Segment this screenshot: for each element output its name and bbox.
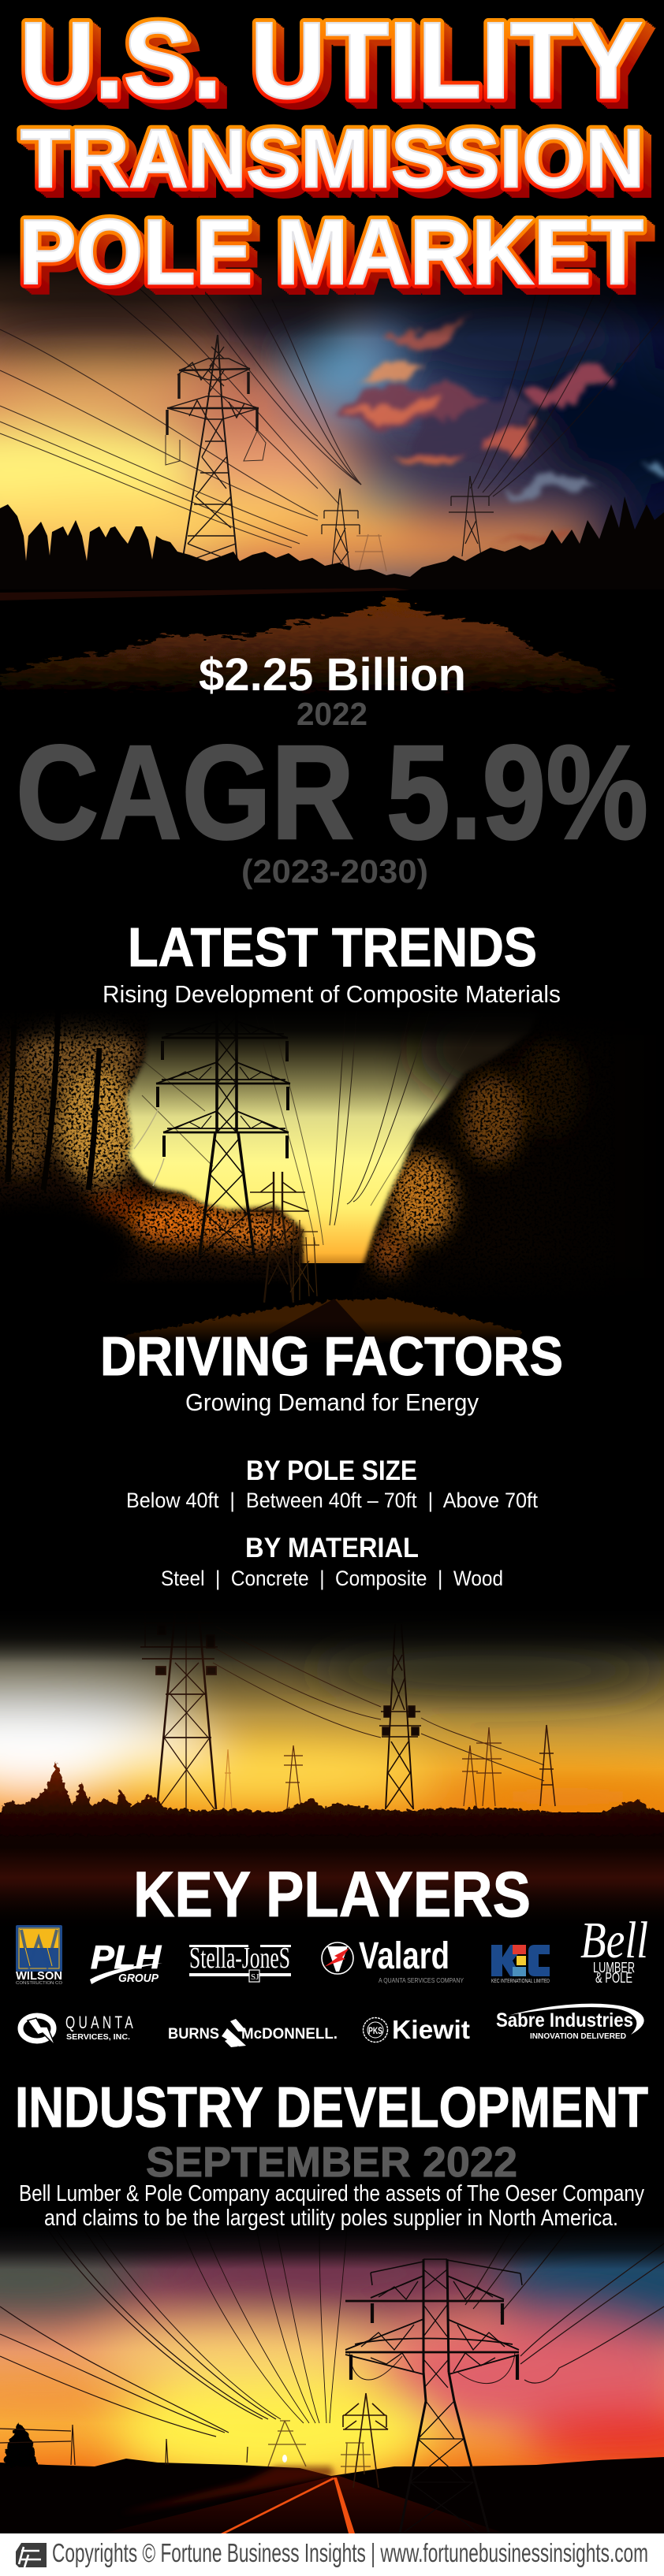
logo: Bell Lumber and Pole: [580, 1912, 648, 1986]
photo: sunset sky with transmission towers: [0, 252, 664, 697]
logo: Valard: A QUANTA SERVICES COMPANY: [379, 1976, 464, 1984]
logo: Kiewit: Kiewit: [392, 2015, 470, 2044]
logo: Wilson: CONSTRUCTION CO: [16, 1981, 62, 1986]
logo: Quanta Services: SERVICES, INC.: [66, 2033, 130, 2042]
title: [19, 0, 644, 303]
footer bar: [0, 2533, 664, 2576]
logo: Valard: [322, 1935, 464, 1984]
heading: driving factors: DRIVING FACTORS: [100, 1325, 563, 1387]
logo: Burns and McDonnell: McDONNELL.: [241, 2026, 338, 2043]
icon: small left tree: [5, 2423, 36, 2466]
heading: by material: BY MATERIAL: [245, 1533, 419, 1563]
development date: SEPTEMBER 2022: [146, 2139, 517, 2186]
icon: left small towers: [0, 2425, 248, 2465]
icon: middle tower: [379, 1624, 421, 1809]
logo: Sabre Industries: INNOVATION DELIVERED: [530, 2031, 626, 2041]
trees: right foliage: [360, 1032, 590, 1288]
road: [103, 2466, 505, 2533]
driver text: Growing Demand for Energy: [185, 1388, 479, 1416]
icon: foreground large tower: [345, 2259, 522, 2533]
heading: by pole size: BY POLE SIZE: [246, 1455, 417, 1486]
logo: Sabre Industries: [496, 2004, 644, 2041]
icon: main tower: [166, 335, 266, 563]
logo: Stella-Jones: SJ: [251, 1972, 259, 1982]
clouds: [341, 315, 664, 548]
power lines: [213, 1648, 544, 1781]
logo: Stella-Jones: Stella-JoneS: [189, 1942, 290, 1975]
logo: Stella-Jones: [189, 1942, 291, 1982]
logo: KEC: KEC INTERNATIONAL LIMITED: [491, 1979, 550, 1984]
heading: latest trends: LATEST TRENDS: [128, 916, 537, 978]
ground: [0, 1812, 664, 1912]
logo: Bell Lumber and Pole: LUMBER: [593, 1960, 635, 1976]
ground road: [103, 1299, 520, 1344]
power lines: [142, 1049, 451, 1245]
title line 2: TRANSMISSION: [21, 113, 644, 205]
industry development text: [19, 2181, 644, 2231]
trunks: [8, 1009, 99, 1190]
power lines: [0, 284, 664, 548]
sun: [282, 2455, 287, 2463]
icon: distant towers: [268, 2393, 388, 2488]
logo: PLH Group: GROUP: [118, 1972, 159, 1985]
icon: distant towers: [322, 476, 494, 574]
logo: Kiewit: PKS: [368, 2025, 382, 2036]
logo: Bell Lumber and Pole: & POLE: [595, 1970, 632, 1986]
tree line: [0, 1762, 664, 1836]
logo: Wilson: WILSON: [16, 1969, 62, 1983]
title line 1: U.S. UTILITY: [20, 0, 643, 121]
logo: Valard: Valard: [359, 1935, 450, 1977]
sky right shade: [397, 1039, 513, 1117]
title line 1: U.S. UTILITY: [20, 0, 643, 121]
forecast period: (2023-2030): [241, 853, 428, 890]
logo: Quanta Services: [21, 2013, 136, 2046]
logo: Burns and McDonnell: [168, 2019, 338, 2047]
logo: Quanta Services: QUANTA: [65, 2013, 136, 2032]
title line 1: U.S. UTILITY: [20, 0, 643, 121]
title line 2: TRANSMISSION: [21, 113, 644, 205]
trend text: Rising Development of Composite Materials: [103, 980, 561, 1008]
icon: receding towers: [250, 1172, 319, 1303]
icon: Fortune Business Insights logo: [16, 2543, 47, 2567]
heading: key players: KEY PLAYERS: [133, 1859, 531, 1931]
icon: foreground tower: [134, 1011, 290, 1255]
lower shade: [0, 1198, 664, 1344]
logo: Bell Lumber and Pole: Bell: [580, 1912, 648, 1969]
logo: Sabre Industries: Sabre Industries: [496, 2009, 633, 2031]
photo: towers at dusk: [0, 1626, 664, 1912]
logo: PLH Group: PLH: [91, 1939, 162, 1976]
base year: 2022: [297, 696, 367, 732]
ground: [0, 2457, 664, 2533]
pole size segments: Below 40ft | Between 40ft – 70ft | Above 70ft: [126, 1489, 538, 1512]
market size value: $2.25 Billion: [199, 649, 466, 701]
photo: towers in glowing forest: [0, 1017, 590, 1340]
title line 2: TRANSMISSION: [21, 113, 644, 205]
material segments: Steel | Concrete | Composite | Wood: [161, 1567, 503, 1590]
trees: left foliage: [0, 1017, 308, 1280]
trees silhouette: [0, 496, 664, 589]
icon: large tower: [140, 1639, 218, 1809]
logo: Burns and McDonnell: BURNS: [168, 2026, 219, 2043]
logo: Wilson: [16, 1925, 62, 1986]
icon: distant towers: [224, 1725, 555, 1809]
power lines: [0, 2228, 664, 2437]
photo: towers over road at sunset: [0, 2226, 664, 2533]
logo: KEC: [491, 1945, 550, 1984]
water reflection: [0, 588, 664, 697]
